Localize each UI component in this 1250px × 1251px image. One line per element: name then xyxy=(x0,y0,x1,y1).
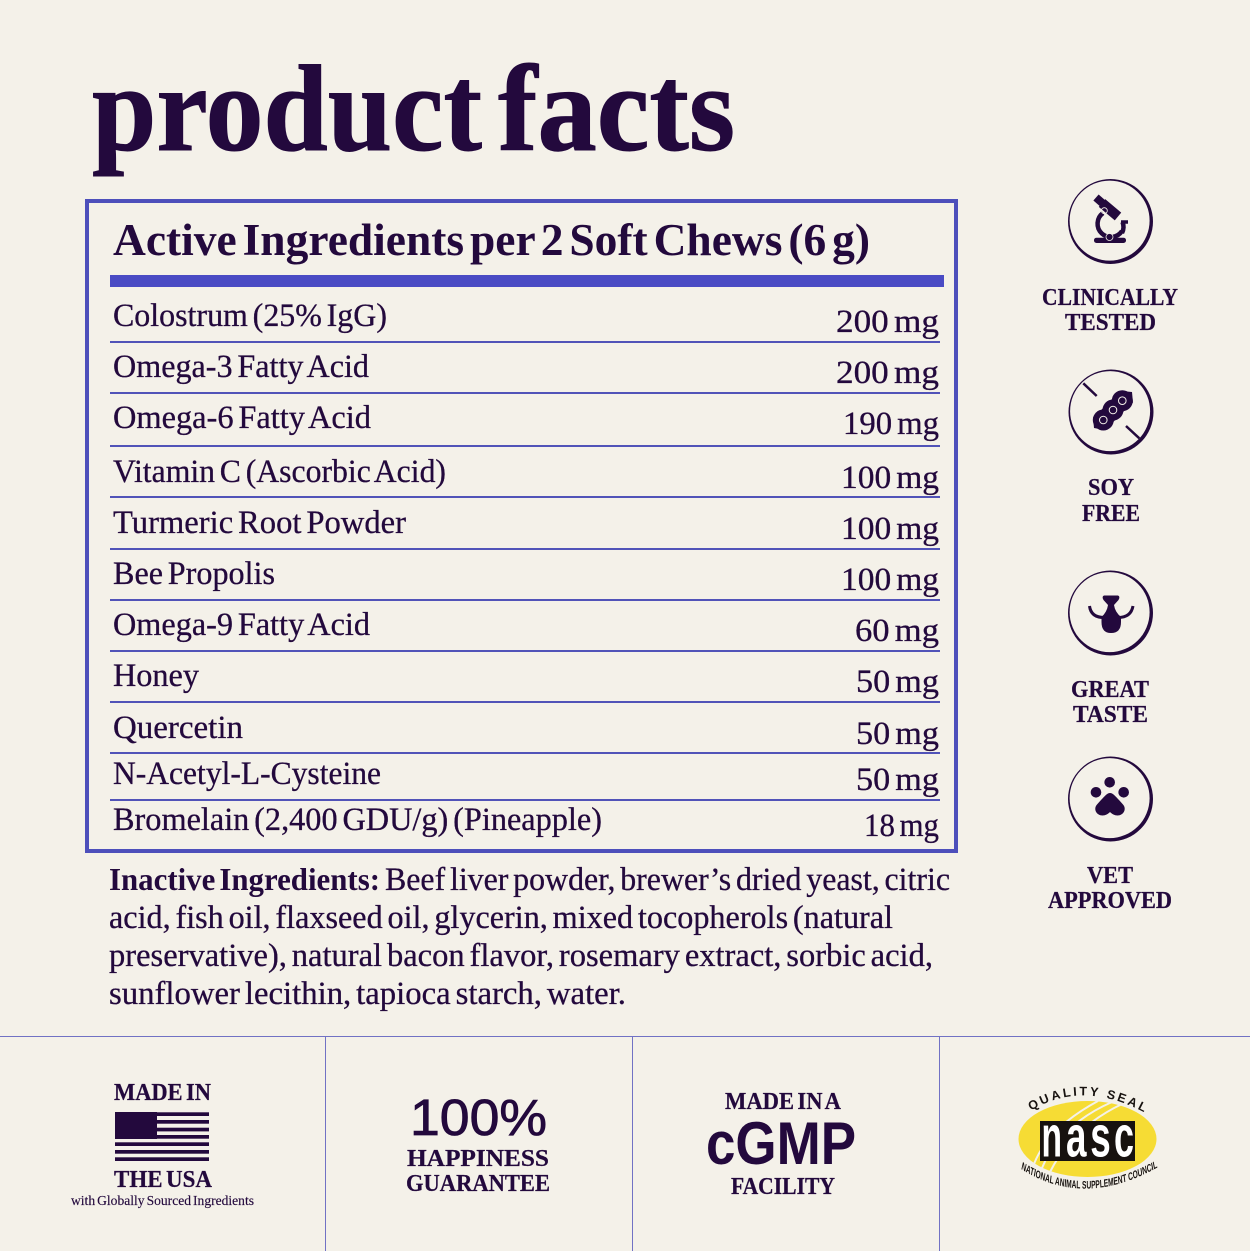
footer: made in the usa: with Globally Sourced Ingredients xyxy=(71,1194,254,1209)
footer: happiness guarantee: GUARANTEE xyxy=(406,1171,550,1197)
nasc letter blocks xyxy=(1040,1104,1135,1170)
heading rule xyxy=(110,275,944,287)
row: bee propolis xyxy=(110,556,940,601)
row: vitamin c xyxy=(110,454,940,498)
badge: clinically tested xyxy=(1042,179,1178,336)
footer: cgmp facility: FACILITY xyxy=(731,1174,835,1200)
row: colostrum xyxy=(110,298,940,343)
row: n-acetyl-l-cysteine: 50 mg xyxy=(856,762,939,798)
footer: cgmp facility: cGMP xyxy=(706,1110,856,1177)
label: SOY xyxy=(1088,475,1134,501)
label: TESTED xyxy=(1065,310,1156,336)
footer: cgmp facility: MADE IN A xyxy=(725,1089,842,1115)
row: omega-9: Omega-9 Fatty Acid xyxy=(113,607,370,643)
icon: paw print xyxy=(1068,756,1153,842)
row: bee propolis: Bee Propolis xyxy=(113,556,275,592)
row: quercetin xyxy=(110,710,940,754)
row: vitamin c: Vitamin C (Ascorbic Acid) xyxy=(113,454,446,490)
footer: happiness guarantee: HAPPINESS xyxy=(407,1146,549,1172)
footer: made in the usa xyxy=(71,1080,254,1209)
footer: made in the usa: MADE IN xyxy=(114,1080,212,1106)
row: turmeric: 100 mg xyxy=(841,511,939,547)
row: bromelain: 18 mg xyxy=(864,808,939,844)
label: VET xyxy=(1087,863,1133,889)
row: omega-9: 60 mg xyxy=(855,613,939,649)
row: omega-6 xyxy=(110,400,940,447)
footer: happiness guarantee xyxy=(406,1089,550,1197)
icon: us flag xyxy=(115,1112,209,1161)
inactive ingredients text: preservative), natural bacon flavor, rosemary extract, sorbic acid, xyxy=(109,938,933,974)
nasc letter blocks: c xyxy=(1114,1104,1134,1170)
row: omega-3 xyxy=(110,349,940,394)
label xyxy=(1071,677,1149,728)
row: colostrum: Colostrum (25% IgG) xyxy=(113,298,387,334)
row: n-acetyl-l-cysteine: N-Acetyl-L-Cysteine xyxy=(113,756,381,792)
title: facts xyxy=(498,40,735,177)
title xyxy=(92,40,735,177)
council arc text: NATIONAL ANIMAL SUPPLEMENT COUNCIL xyxy=(1021,1162,1158,1189)
label xyxy=(1048,863,1172,914)
footer: made in the usa: THE USA xyxy=(114,1167,213,1193)
icon: soy pod crossed out xyxy=(1068,370,1154,454)
badge: great taste xyxy=(1068,570,1153,728)
inactive ingredients text: Beef liver powder, brewer’s dried yeast, citric xyxy=(385,862,950,898)
row: honey xyxy=(110,658,940,703)
icon: microscope xyxy=(1068,179,1153,264)
nasc letter blocks: n xyxy=(1042,1104,1062,1170)
inactive ingredients text: Inactive Ingredients: xyxy=(109,861,380,897)
title: product xyxy=(92,40,482,177)
footer: nasc quality seal xyxy=(1018,1086,1158,1189)
table border xyxy=(87,201,956,851)
panel: active ingredients table xyxy=(87,201,956,851)
row: omega-6: Omega-6 Fatty Acid xyxy=(113,400,371,436)
quality seal arc text: QUALITY SEAL xyxy=(1028,1086,1144,1112)
label: CLINICALLY xyxy=(1042,285,1178,311)
icon: dog muzzle xyxy=(1068,570,1153,656)
row: bromelain xyxy=(113,802,939,844)
row: quercetin: 50 mg xyxy=(856,716,939,752)
inactive ingredients text: sunflower lecithin, tapioca starch, water. xyxy=(109,976,626,1012)
label xyxy=(1042,285,1178,336)
row: n-acetyl-l-cysteine xyxy=(110,756,940,801)
yellow ellipse xyxy=(1018,1101,1156,1177)
badge: vet approved xyxy=(1048,756,1172,914)
row: omega-6: 190 mg xyxy=(843,406,939,442)
footer: happiness guarantee: 100% xyxy=(410,1089,547,1146)
row: quercetin: Quercetin xyxy=(113,710,243,746)
badge: soy free xyxy=(1068,370,1154,527)
nasc letter blocks: s xyxy=(1090,1104,1111,1170)
row: bee propolis: 100 mg xyxy=(841,562,939,598)
label: FREE xyxy=(1082,501,1140,527)
row: vitamin c: 100 mg xyxy=(841,460,939,496)
label: APPROVED xyxy=(1048,888,1172,914)
label: TASTE xyxy=(1073,702,1148,728)
row: omega-3: 200 mg xyxy=(836,355,939,391)
row: bromelain: Bromelain (2,400 GDU/g) (Pineapple) xyxy=(113,802,602,838)
row: omega-3: Omega-3 Fatty Acid xyxy=(113,349,369,385)
row: colostrum: 200 mg xyxy=(836,304,939,340)
row: turmeric xyxy=(110,505,940,550)
row: honey: 50 mg xyxy=(856,664,939,700)
inactive ingredients text xyxy=(109,861,950,1012)
row: omega-9 xyxy=(110,607,940,652)
row: honey: Honey xyxy=(113,658,199,694)
footer: cgmp facility xyxy=(706,1089,856,1200)
label: GREAT xyxy=(1071,677,1149,703)
label xyxy=(1082,475,1140,527)
row: turmeric: Turmeric Root Powder xyxy=(113,505,406,541)
table heading: Active Ingredients per 2 Soft Chews (6 g) xyxy=(113,215,870,265)
inactive ingredients text: acid, fish oil, flaxseed oil, glycerin, mixed tocopherols (natural xyxy=(109,900,893,936)
nasc letter blocks: a xyxy=(1066,1104,1087,1170)
